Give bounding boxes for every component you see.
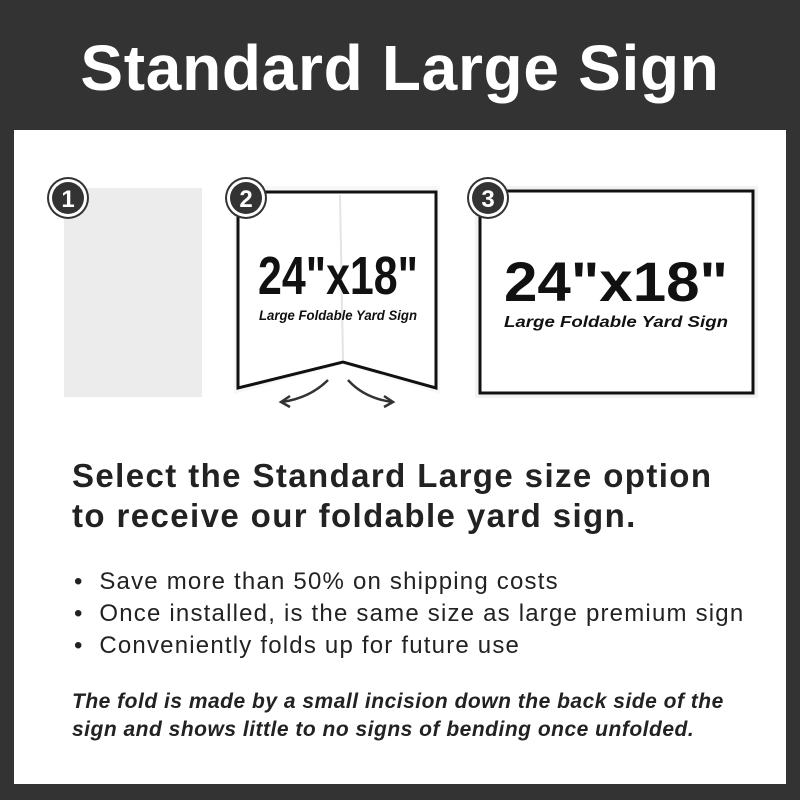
- heading: select option: to receive our foldable yard sign.: [72, 497, 637, 534]
- arrows: unfold: [281, 380, 393, 407]
- badge 2: [225, 177, 267, 219]
- badge 3: 3: [481, 186, 495, 213]
- sign 1: blank board: [64, 188, 202, 397]
- badge 3: [467, 177, 509, 219]
- badge 1: [47, 177, 89, 219]
- note text: sign and shows little to no signs of bending once unfolded.: [72, 718, 694, 741]
- heading: select option: [72, 457, 712, 534]
- sign 3: unfolded sign: Large Foldable Yard Sign: [504, 314, 728, 331]
- note text: The fold is made by a small incision down the back side of the: [72, 690, 724, 713]
- illustrations: [47, 177, 758, 408]
- panel: content: [14, 130, 786, 784]
- bullet list: • Conveniently folds up for future use: [74, 632, 520, 659]
- sign 3: unfolded sign: 24"x18": [504, 250, 728, 313]
- sign 2: folded sign: Large Foldable Yard Sign: [259, 307, 417, 323]
- badge 2: 2: [239, 186, 253, 213]
- bullet list: • Once installed, is the same size as large premium sign: [74, 600, 744, 627]
- bullet list: [74, 568, 744, 659]
- sign 3: unfolded sign: [475, 186, 758, 398]
- title: Standard Large Sign: [80, 32, 720, 104]
- bullet list: • Save more than 50% on shipping costs: [74, 568, 559, 595]
- badge 1: 1: [61, 186, 75, 213]
- heading: select option: Select the Standard Large size option: [72, 457, 712, 494]
- sign 2: folded sign: 24"x18": [258, 246, 418, 306]
- sign 2: folded sign: [234, 186, 440, 394]
- note text: [72, 690, 724, 741]
